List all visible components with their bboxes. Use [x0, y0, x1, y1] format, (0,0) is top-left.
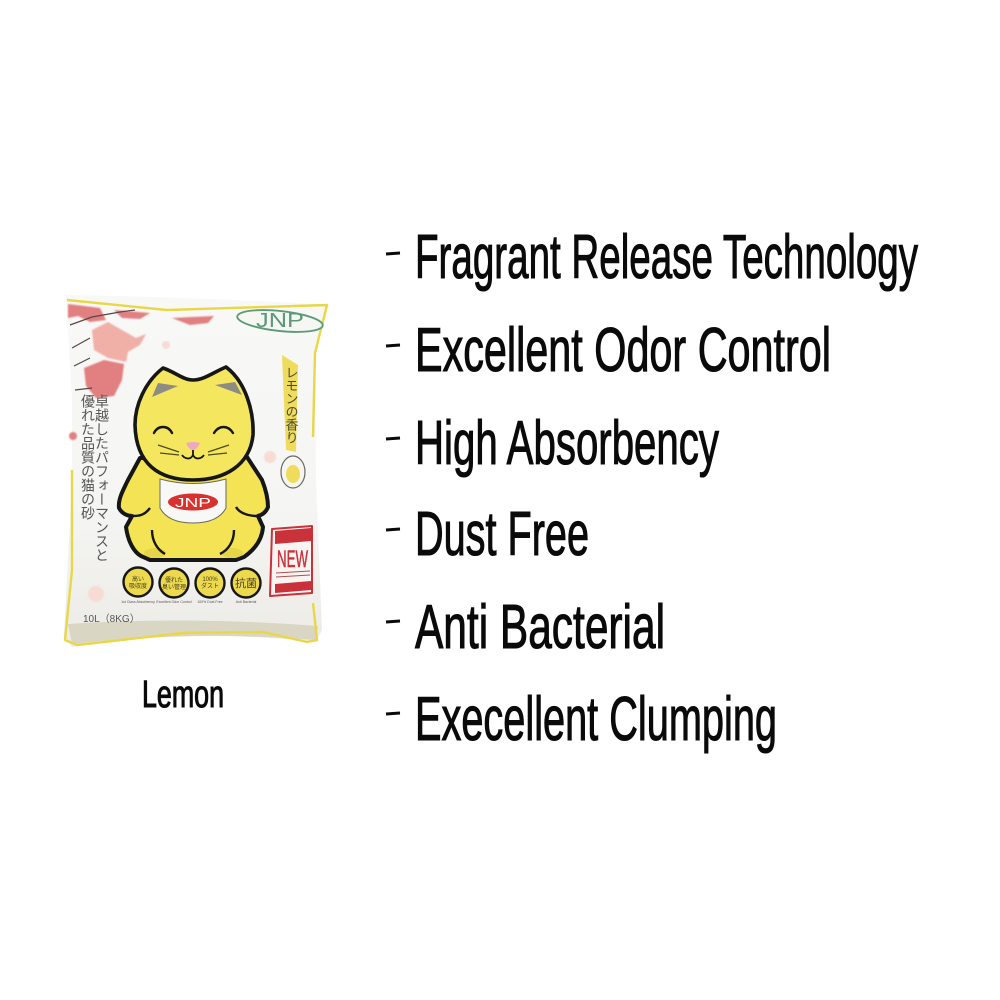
feature badges: 100% Dust Free	[197, 600, 223, 604]
vertical slogan: 優れた品質の猫の砂	[80, 394, 96, 520]
cat arms	[132, 507, 258, 554]
cat body	[119, 457, 268, 560]
JNP logo	[236, 307, 324, 335]
feature badges: 抗菌	[235, 577, 257, 590]
feature badges: 高い	[132, 575, 144, 583]
feature badges: Excellent Odor Control	[156, 600, 192, 604]
bag body	[64, 295, 330, 647]
blossom branches	[70, 310, 135, 390]
feature: Execellent Clumping: Execellent Clumping	[415, 685, 777, 754]
JNP logo: JNP	[256, 310, 304, 332]
vertical slogan	[80, 394, 110, 562]
feature badges: ダスト	[201, 582, 219, 590]
feature: Dust Free: Dust Free	[415, 500, 589, 569]
NEW badge	[270, 526, 312, 596]
feature badges: 臭い管理	[162, 583, 186, 591]
cat feet	[144, 548, 166, 558]
feature: High Absorbency: High Absorbency	[415, 409, 719, 478]
faint petals	[88, 341, 276, 602]
feature badges	[121, 568, 260, 604]
cat face	[154, 427, 233, 433]
feature list	[386, 223, 918, 754]
cat head	[135, 367, 253, 480]
lemon scent label: レモンの香り	[284, 366, 298, 444]
red bib logo: JNP	[175, 495, 211, 510]
NEW badge: NEW	[277, 546, 308, 573]
vertical slogan: 卓越したパフォーマンスと	[94, 394, 110, 562]
feature badges: 100%	[202, 577, 218, 583]
cat bib	[160, 479, 226, 523]
cat ears	[152, 382, 242, 397]
bag yellow trim	[65, 300, 327, 645]
product bag	[64, 295, 330, 647]
feature badges: 吸収度	[129, 582, 147, 590]
feature badges: 1st Class Absorbency	[121, 600, 155, 604]
cherry blossoms	[68, 304, 214, 440]
red bib logo	[168, 494, 218, 510]
caption: Lemon: Lemon	[142, 674, 224, 716]
bag bottom shading	[68, 620, 318, 644]
feature badges: Anti Bacterial	[236, 600, 257, 604]
lemon icon	[281, 456, 305, 488]
feature: Anti Bacterial: Anti Bacterial	[415, 593, 665, 662]
feature badges: 優れた	[165, 576, 183, 584]
cat mascot	[119, 367, 268, 560]
volume label: 10L（8KG）	[83, 613, 140, 625]
pale blossoms	[92, 322, 146, 362]
